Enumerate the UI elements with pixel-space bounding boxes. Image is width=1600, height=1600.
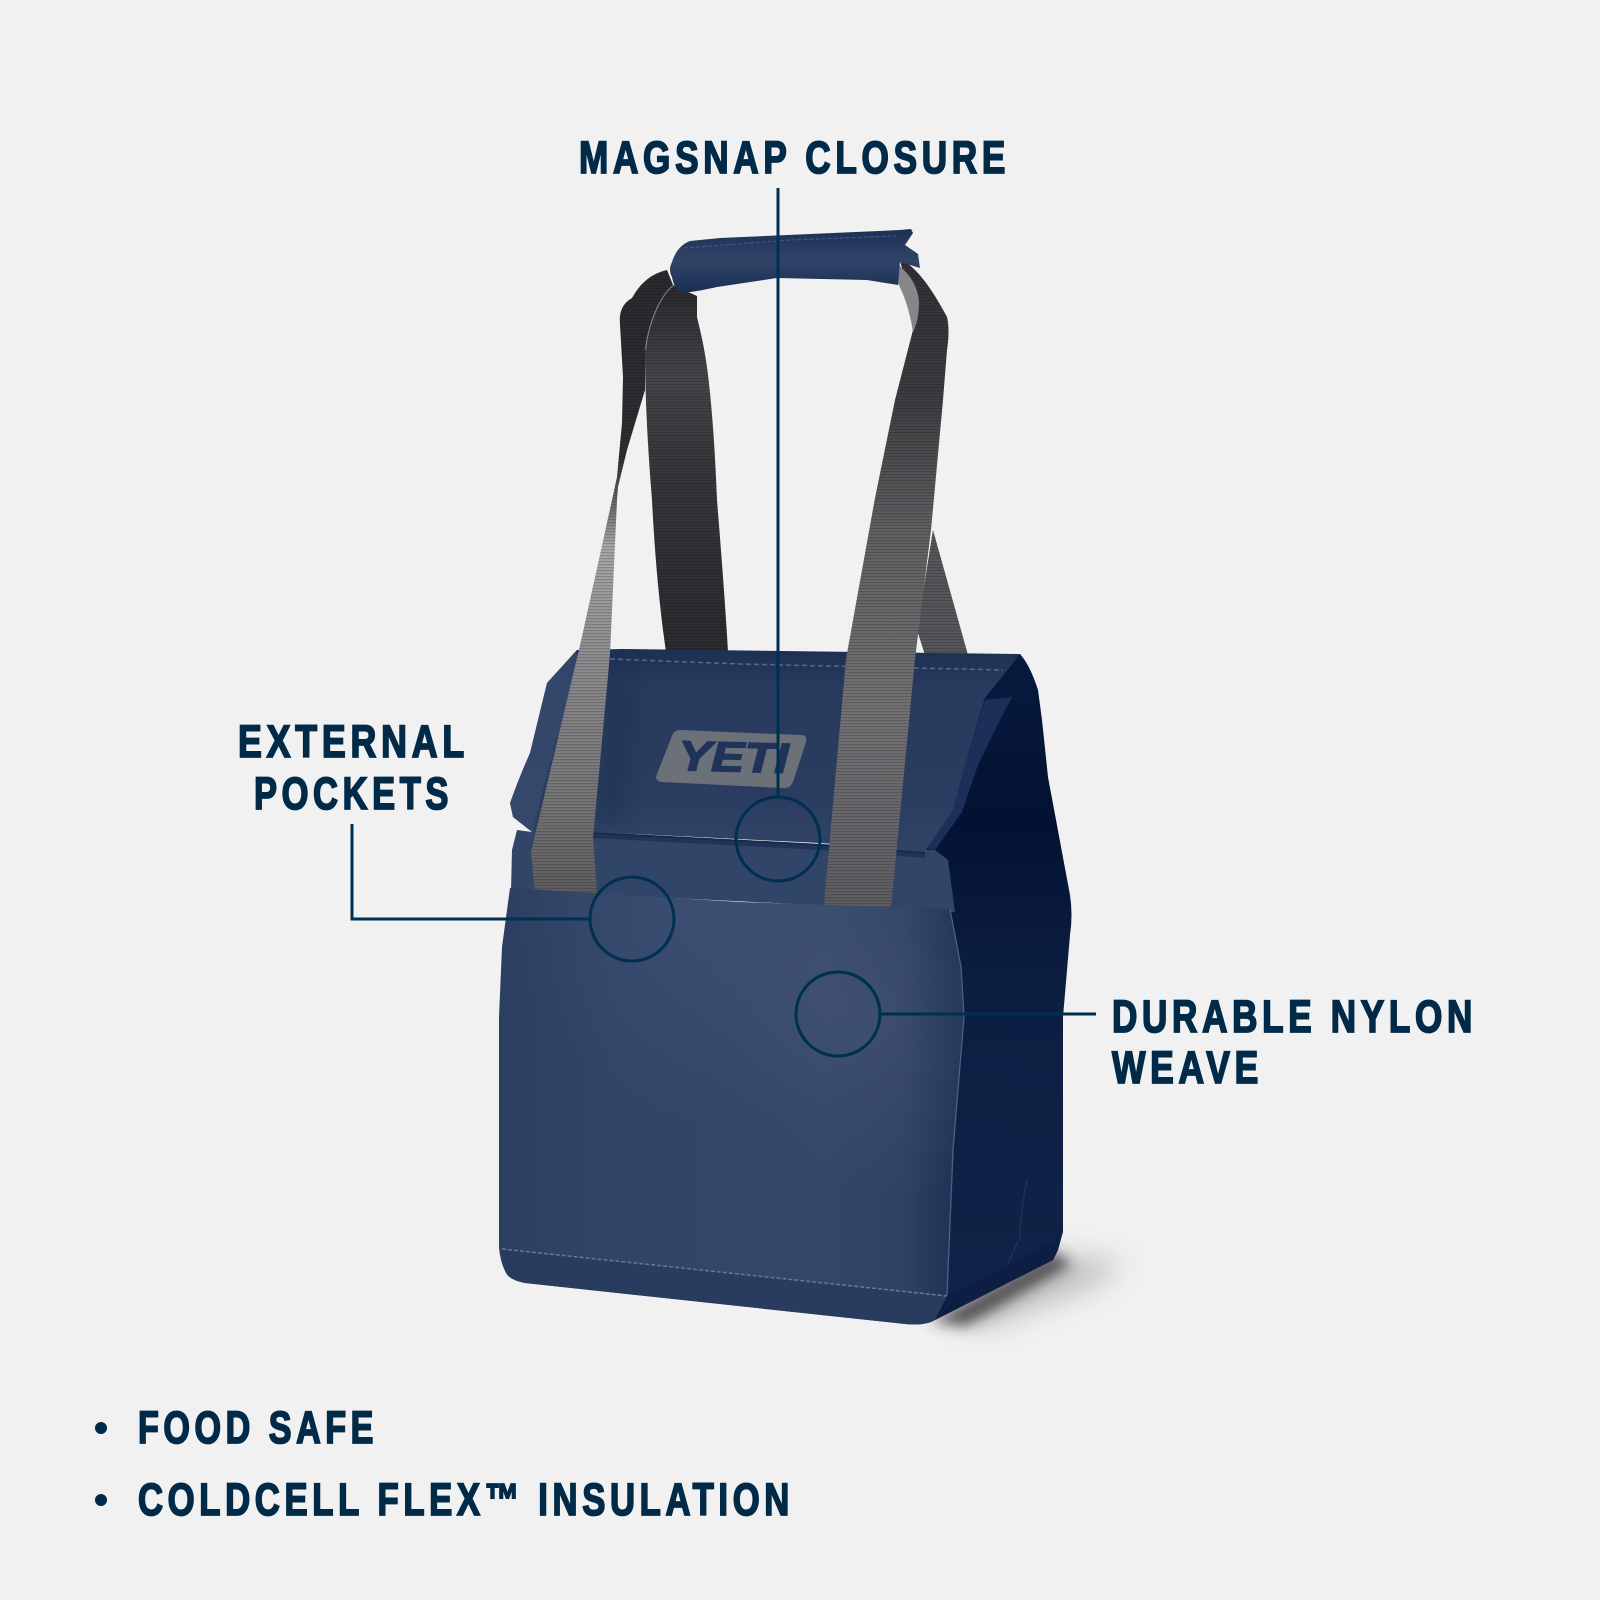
logo badge [656, 730, 806, 788]
leader line [881, 1012, 1096, 1016]
side seam [947, 909, 964, 1295]
label [238, 716, 469, 819]
callout: magsnap closure [579, 132, 1010, 881]
lower back panel [511, 830, 955, 912]
flap shadow on lower panel [593, 834, 925, 858]
feature: coldcell flex insulation: COLDCELL FLEX™ INSULATION [138, 1474, 794, 1525]
label: POCKETS [254, 768, 453, 819]
side stitching [1008, 1180, 1027, 1263]
product photo: navy tote cooler bag [499, 229, 1125, 1328]
feature list [95, 1402, 794, 1525]
flap top [510, 649, 1020, 851]
label [1112, 991, 1477, 1093]
front left strap [531, 270, 673, 893]
front right strap [824, 258, 948, 908]
front pocket panel [499, 888, 964, 1324]
flap light left edge [510, 652, 590, 832]
leader line [776, 188, 780, 797]
feature: food safe: FOOD SAFE [138, 1402, 378, 1453]
label: WEAVE [1112, 1042, 1263, 1093]
callout: durable nylon weave [796, 972, 1477, 1093]
bottom stitching [502, 1249, 947, 1296]
leader line [352, 824, 589, 919]
flap stitching [610, 659, 1003, 670]
marker circle [796, 972, 880, 1056]
back right strap [917, 530, 968, 655]
ground shadow [930, 1252, 1125, 1328]
logo text: YETI [678, 732, 791, 782]
flap shadow beside strap [595, 665, 634, 825]
handle grip [670, 229, 920, 293]
marker circle [736, 797, 820, 881]
side gusset [925, 654, 1072, 1320]
flap shadow line [593, 833, 925, 853]
bottom lip [500, 1248, 947, 1324]
inner side fold [923, 697, 1012, 850]
side bottom lip [935, 1238, 1060, 1320]
bullet: food safe [95, 1422, 107, 1434]
pocket highlight top [499, 888, 964, 1295]
label: DURABLE NYLON [1112, 991, 1477, 1042]
bullet: coldcell flex [95, 1494, 107, 1506]
label: EXTERNAL [238, 716, 469, 767]
callout: external pockets [238, 716, 674, 961]
marker circle [590, 877, 674, 961]
back left strap [645, 285, 728, 652]
pocket highlight right [499, 888, 964, 1295]
label: MAGSNAP CLOSURE [579, 132, 1010, 183]
